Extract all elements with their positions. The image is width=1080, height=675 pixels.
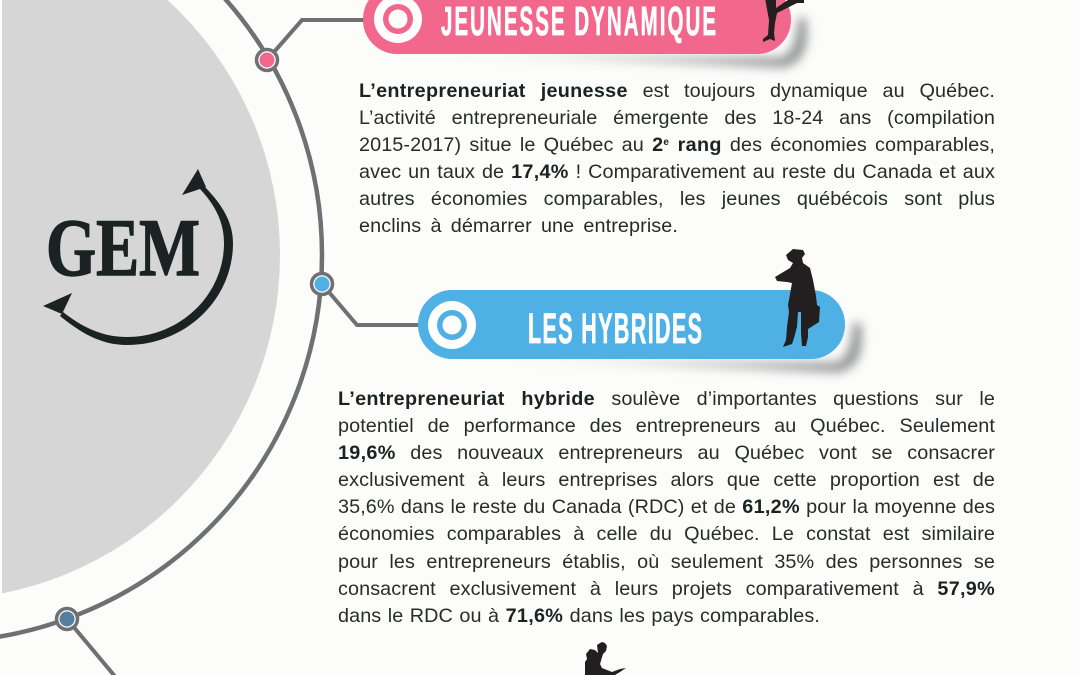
text block: jeunesse: enclins à démarrer une entreprise. [359,215,678,237]
text block: hybrides: potentiel de performance des entrepreneurs au Québec. Seulement [338,415,995,437]
circular arrow [43,169,233,345]
text block: hybrides: pour les entrepreneurs établis, où seulement 35% des personnes se [338,551,995,573]
node: blue [312,274,332,294]
banner: les hybrides [418,249,862,373]
banner shadow [440,18,807,68]
GEM logo [43,169,233,345]
connector: pink node to banner [267,20,365,60]
text block: hybrides [338,388,995,627]
outer ring [0,0,322,642]
text block: jeunesse: avec un taux de 17,4% ! Comparativement au reste du Canada et aux [359,161,995,183]
text block: jeunesse: autres économies comparables, les jeunes québécois sont plus [359,188,995,210]
text block: jeunesse: L’entrepreneuriat jeunesse est toujours dynamique au Québec. [359,80,995,102]
banner title: LES HYBRIDES [528,305,702,353]
GEM wordmark: GEM [46,202,200,293]
banner shadow [495,323,862,373]
text block: jeunesse [359,80,995,237]
silhouette: woman with handbag [775,249,820,347]
text block: jeunesse: 2015-2017) situe le Québec au 2e rang des économies comparables, [359,134,995,156]
text block: hybrides: exclusivement à leurs entreprises alors que cette proportion est de [338,469,995,491]
text block: hybrides: consacrent exclusivement à leurs projets comparativement à 57,9% [338,578,995,600]
text block: hybrides: 19,6% des nouveaux entrepreneurs au Québec vont se consacrer [338,442,995,464]
target icon [428,301,476,349]
node: pink [256,50,278,70]
text block: hybrides: 35,6% dans le reste du Canada (RDC) et de 61,2% pour la moyenne des [338,496,995,518]
grey central circle [0,0,280,600]
silhouette: person with raised arm [585,642,626,675]
node: dark blue [56,608,78,630]
text block: jeunesse: L’activité entrepreneuriale émergente des 18-24 ans (compilation [359,107,995,129]
silhouette: kicking legs [763,0,804,42]
text block: hybrides: L’entrepreneuriat hybride soulève d’importantes questions sur le [338,388,995,410]
text block: hybrides: économies comparables à celle du Québec. Le constat est similaire [338,523,995,545]
text block: hybrides: dans le RDC ou à 71,6% dans les pays comparables. [338,605,820,627]
connector: dark blue node downward [67,619,118,675]
banner: jeunesse dynamique [363,0,807,68]
connector: blue node to banner [322,284,420,325]
target icon [374,0,422,43]
